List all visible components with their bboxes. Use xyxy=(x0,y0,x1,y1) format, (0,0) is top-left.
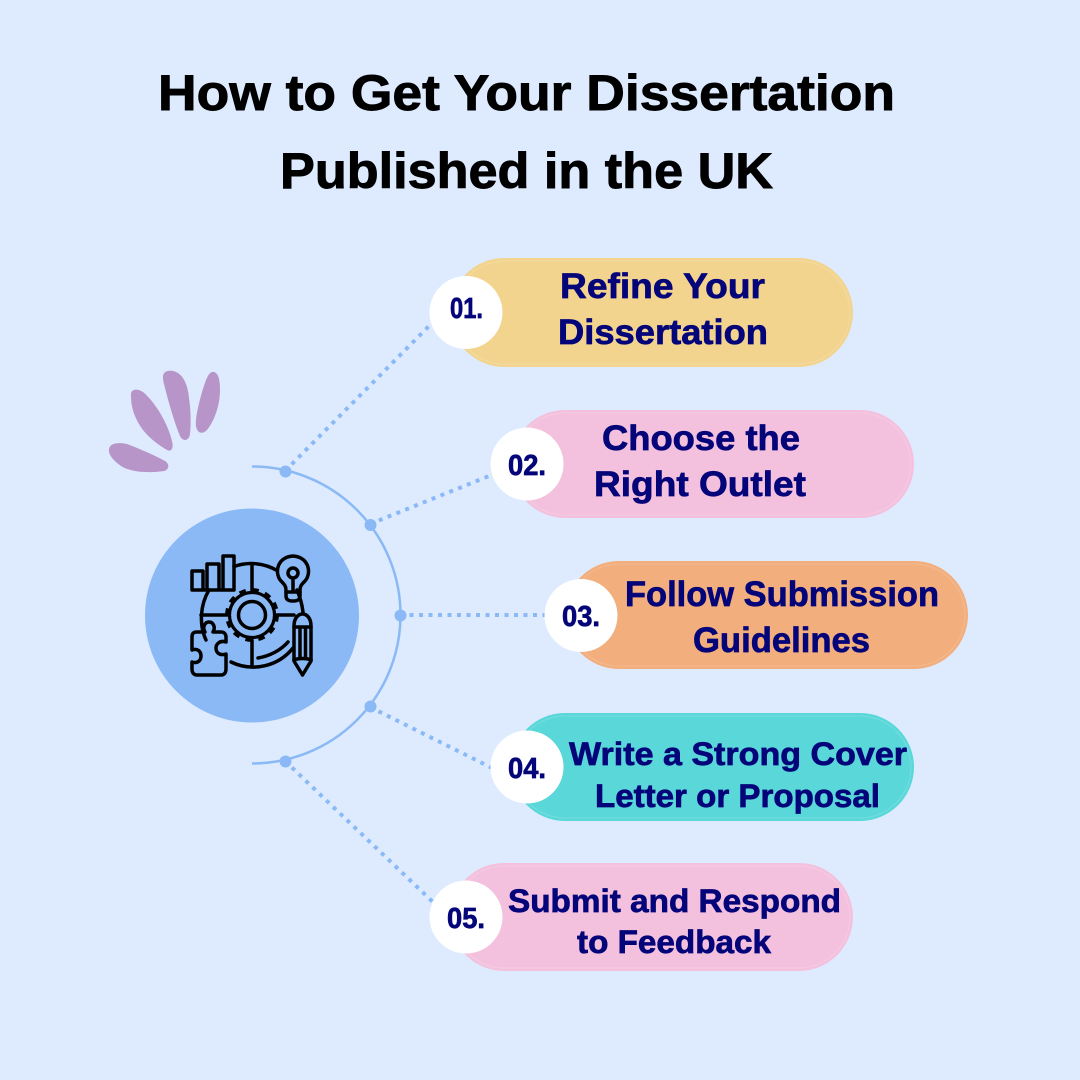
connector arc xyxy=(252,466,400,764)
step 2: Choose the xyxy=(602,419,800,458)
central circle xyxy=(145,508,359,722)
wheel xyxy=(234,564,277,570)
step 4: 04. xyxy=(508,753,546,785)
step 3: Guidelines xyxy=(693,621,870,660)
step 5 xyxy=(430,863,853,971)
icon: research gear, chart, bulb, puzzle, pencil xyxy=(192,556,311,675)
title: How to Get Your Dissertation xyxy=(158,65,895,121)
connector nodes xyxy=(280,466,406,768)
pencil xyxy=(294,614,311,675)
step 2 xyxy=(490,410,914,518)
step 3: 03. xyxy=(562,601,600,633)
step 5: 05. xyxy=(447,903,485,935)
title: Published in the UK xyxy=(280,143,773,199)
step 1: 01. xyxy=(450,293,483,325)
step 1 xyxy=(430,258,853,367)
step 1: Dissertation xyxy=(558,313,768,352)
step 5: to Feedback xyxy=(577,924,771,960)
bulb xyxy=(277,556,309,601)
step 3: Follow Submission xyxy=(625,575,939,614)
step 4 xyxy=(490,713,914,821)
step 4: Letter or Proposal xyxy=(595,778,880,814)
step 3 xyxy=(544,561,968,669)
title xyxy=(158,65,895,199)
puzzle xyxy=(192,622,226,675)
step 1: Refine Your xyxy=(560,267,765,306)
step 2: 02. xyxy=(508,450,546,482)
dotted connectors xyxy=(285,322,546,904)
bars xyxy=(192,556,234,590)
step 4: Write a Strong Cover xyxy=(569,736,907,772)
decorative petals xyxy=(109,371,220,472)
step 2: Right Outlet xyxy=(594,465,806,504)
step 5: Submit and Respond xyxy=(508,883,841,919)
